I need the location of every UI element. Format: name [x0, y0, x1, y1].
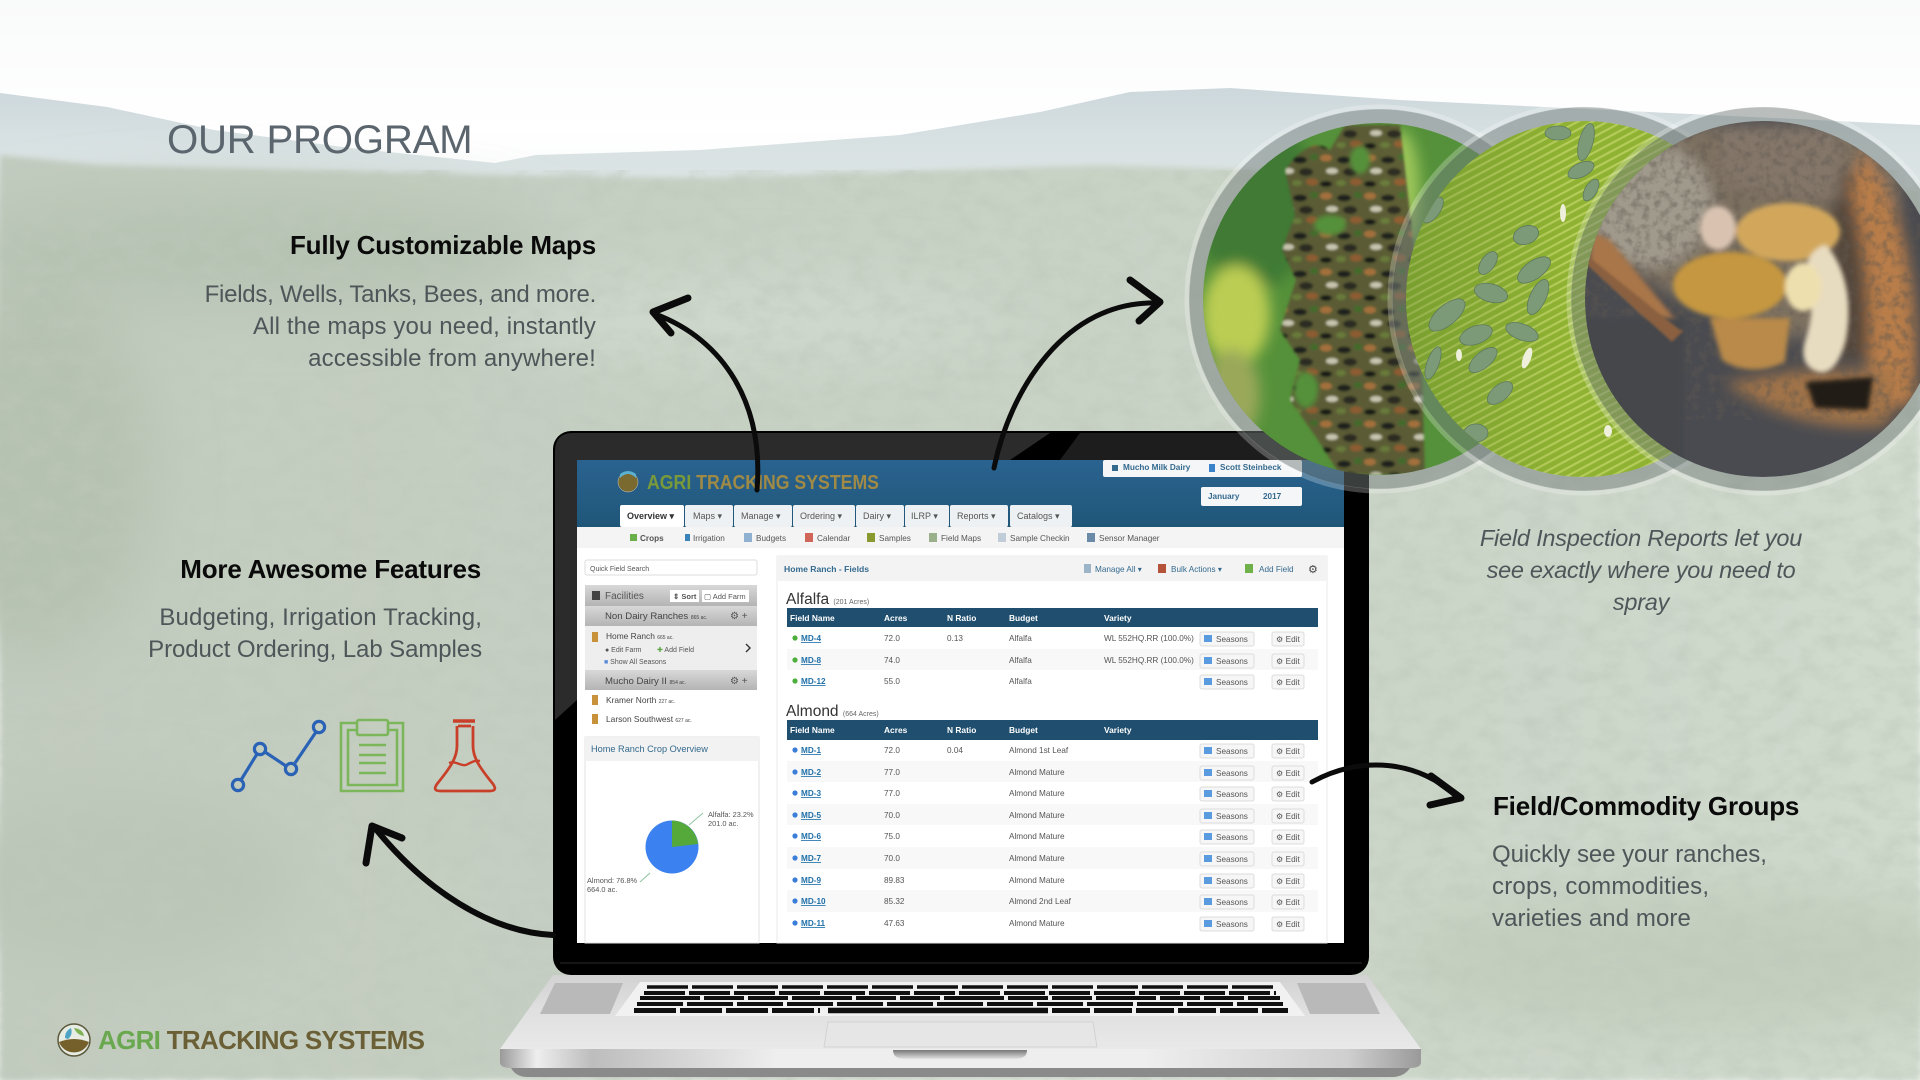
table: alfalfa: 74.0 [884, 656, 900, 665]
table: almond: Almond Mature [1009, 811, 1065, 820]
left sidebar: Facilities [605, 591, 644, 602]
text: commodity description: crops, commodities, [1492, 873, 1709, 900]
table: almond: ⚙ Edit [1276, 747, 1300, 756]
table: almond: Almond Mature [1009, 854, 1065, 863]
crop overview panel with pie chart: Almond: 76.8% [587, 876, 638, 885]
text: field inspection reports: Field Inspection Reports let you [1480, 525, 1802, 551]
table: almond: MD-3 [801, 789, 821, 798]
table: almond: 70.0 [884, 811, 900, 820]
sub navigation [577, 527, 1344, 548]
table: almond: Almond (664 Acres) [786, 703, 879, 720]
app screen [577, 460, 1344, 943]
sub navigation: Sample Checkin [1010, 534, 1070, 543]
main panel header [777, 556, 1327, 943]
table: alfalfa: MD-12 [801, 677, 826, 686]
table: almond: 75.0 [884, 832, 900, 841]
table: almond: 89.83 [884, 876, 905, 885]
table: alfalfa: Seasons [1216, 678, 1248, 687]
table: almond: Almond 2nd Leaf [1009, 897, 1072, 906]
nav tabs: Dairy ▾ [863, 511, 892, 521]
sub navigation: Calendar [817, 534, 850, 543]
table: almond: Almond Mature [1009, 876, 1065, 885]
table: alfalfa: 72.0 [884, 634, 900, 643]
photo 2: green aphids on leaf [1388, 107, 1688, 496]
table: alfalfa: Seasons [1216, 657, 1248, 666]
table: almond: MD-1 [801, 746, 821, 755]
table: almond: Budget [1009, 725, 1038, 735]
arrow: to maps heading [653, 298, 758, 490]
nav tabs: Maps ▾ [693, 511, 723, 521]
left sidebar: Kramer North 227 ac. [606, 695, 675, 705]
title: OUR PROGRAM [167, 117, 472, 162]
table: almond: Seasons [1216, 747, 1248, 756]
table: alfalfa: Alfalfa [1009, 677, 1032, 686]
table: alfalfa: 0.13 [947, 634, 963, 643]
nav tabs: Overview ▾ [627, 511, 675, 521]
table: almond: 47.63 [884, 919, 905, 928]
nav tabs: Reports ▾ [957, 511, 996, 521]
left sidebar: ■ Show All Seasons [604, 659, 667, 666]
table: almond: MD-10 [801, 897, 826, 906]
crop overview panel with pie chart [585, 737, 759, 943]
text: maps description: Fields, Wells, Tanks, Bees, and more. [205, 281, 596, 308]
left sidebar: ● Edit Farm [605, 647, 642, 654]
table: alfalfa: MD-8 [801, 656, 821, 665]
app header bar [577, 460, 1344, 527]
text: field inspection reports: see exactly where you need to [1487, 557, 1795, 583]
sub navigation: Sensor Manager [1099, 534, 1160, 543]
table: almond: 77.0 [884, 789, 900, 798]
table: almond: MD-9 [801, 876, 821, 885]
table: alfalfa: Field Name [790, 613, 835, 623]
left sidebar: Larson Southwest 627 ac. [606, 714, 692, 724]
text: field inspection reports [1480, 525, 1802, 615]
table: alfalfa: MD-4 [801, 634, 821, 643]
table: alfalfa: ⚙ Edit [1276, 635, 1300, 644]
inspection photos [1184, 104, 1920, 496]
table: alfalfa: N Ratio [947, 613, 976, 623]
main panel header: Manage All ▾ [1095, 565, 1142, 574]
table: almond: ⚙ Edit [1276, 898, 1300, 907]
text: features description: Budgeting, Irrigation Tracking, [159, 604, 482, 631]
table: almond: Almond Mature [1009, 789, 1065, 798]
arrow: to feature icons [366, 826, 553, 935]
left sidebar: ✚ Add Field [657, 646, 694, 654]
table: almond: Field Name [790, 725, 835, 735]
table: almond: MD-6 [801, 832, 821, 841]
icon: clipboard [341, 720, 403, 791]
left sidebar: ⚙ + [730, 611, 748, 622]
account menu: Scott Steinbeck [1220, 463, 1282, 472]
left sidebar: Home Ranch 665 ac. [606, 631, 674, 641]
table: almond: ⚙ Edit [1276, 833, 1300, 842]
table: almond: 70.0 [884, 854, 900, 863]
sub navigation: Field Maps [941, 534, 981, 543]
table: alfalfa: WL 552HQ.RR (100.0%) [1104, 656, 1194, 665]
left sidebar: ▢ Add Farm [704, 592, 746, 601]
table: almond: 0.04 [947, 746, 963, 755]
crop overview panel with pie chart: Home Ranch Crop Overview [591, 744, 708, 754]
account menu [1103, 460, 1302, 506]
sub navigation: Samples [879, 534, 911, 543]
keyboard [634, 987, 1288, 1010]
table: almond: 72.0 [884, 746, 900, 755]
table: almond: Variety [1104, 725, 1132, 735]
crop overview panel with pie chart: 201.0 ac. [708, 819, 738, 828]
account menu: Mucho Milk Dairy [1123, 463, 1191, 472]
icon: flask [435, 721, 495, 791]
table: almond: N Ratio [947, 725, 976, 735]
arrow: to field groups [1312, 765, 1461, 805]
table: alfalfa: ⚙ Edit [1276, 678, 1300, 687]
main panel header: ⚙ [1308, 564, 1318, 576]
table: alfalfa: Alfalfa (201 Acres) [786, 591, 869, 608]
table: almond: Almond Mature [1009, 832, 1065, 841]
left sidebar: ⇕ Sort [673, 592, 697, 601]
account menu: 2017 [1263, 492, 1282, 501]
account menu: January [1208, 492, 1240, 501]
table: alfalfa: Alfalfa [1009, 656, 1032, 665]
text: commodity description: Quickly see your ranches, [1492, 841, 1767, 868]
heading: field commodity groups: Field/Commodity Groups [1493, 791, 1799, 821]
table: almond: MD-7 [801, 854, 821, 863]
icon: line chart [232, 721, 325, 791]
left sidebar: Quick Field Search [590, 566, 649, 573]
table: alfalfa: Acres [884, 613, 908, 623]
main panel header: Bulk Actions ▾ [1171, 565, 1222, 574]
table: almond: ⚙ Edit [1276, 855, 1300, 864]
photo 1: aphid cluster [1184, 104, 1492, 494]
text: commodity description: varieties and more [1492, 905, 1691, 932]
table: almond: Seasons [1216, 855, 1248, 864]
text: features description: Product Ordering, Lab Samples [148, 636, 482, 663]
table: almond: Almond Mature [1009, 919, 1065, 928]
table: almond: Seasons [1216, 920, 1248, 929]
app header bar: AGRI TRACKING SYSTEMS [647, 472, 879, 494]
laptop lid [553, 431, 1369, 975]
table: almond: Seasons [1216, 790, 1248, 799]
crop overview panel with pie chart: Alfalfa: 23.2% [708, 810, 754, 819]
table: almond: Seasons [1216, 769, 1248, 778]
left sidebar: Mucho Dairy II 854 ac. [605, 676, 686, 687]
table: almond: Seasons [1216, 812, 1248, 821]
table: almond: 77.0 [884, 768, 900, 777]
table: almond: 85.32 [884, 897, 905, 906]
left sidebar: ⚙ + [730, 676, 748, 687]
table: alfalfa: ⚙ Edit [1276, 657, 1300, 666]
nav tabs [620, 505, 1072, 527]
text: field inspection reports: spray [1613, 589, 1669, 615]
table: almond: Seasons [1216, 833, 1248, 842]
table: almond [786, 703, 1318, 931]
table: almond: Almond 1st Leaf [1009, 746, 1069, 755]
main panel header: Home Ranch - Fields [784, 564, 869, 574]
left sidebar: Non Dairy Ranches 865 ac. [605, 611, 707, 622]
table: almond: MD-5 [801, 811, 821, 820]
table: alfalfa: Variety [1104, 613, 1132, 623]
text: maps description: All the maps you need, instantly [253, 313, 596, 340]
table: alfalfa: Seasons [1216, 635, 1248, 644]
table: almond: ⚙ Edit [1276, 812, 1300, 821]
table: almond: MD-2 [801, 768, 821, 777]
nav tabs: Manage ▾ [741, 511, 781, 521]
table: almond: Seasons [1216, 898, 1248, 907]
nav tabs: Catalogs ▾ [1017, 511, 1060, 521]
heading: fully customizable maps: Fully Customizable Maps [290, 230, 596, 260]
crop overview panel with pie chart: 664.0 ac. [587, 885, 617, 894]
table: almond: Almond Mature [1009, 768, 1065, 777]
logo: agri tracking systems: AGRI TRACKING SYSTEMS [98, 1025, 424, 1055]
text: maps description: accessible from anywhere! [308, 345, 596, 372]
main panel header: Add Field [1259, 565, 1294, 574]
table: alfalfa: WL 552HQ.RR (100.0%) [1104, 634, 1194, 643]
table: almond: MD-11 [801, 919, 826, 928]
table: alfalfa: 55.0 [884, 677, 900, 686]
table: alfalfa: Budget [1009, 613, 1038, 623]
nav tabs: Ordering ▾ [800, 511, 843, 521]
table: alfalfa: Alfalfa [1009, 634, 1032, 643]
sub navigation: Crops [640, 534, 664, 543]
left sidebar [585, 560, 757, 729]
table: almond: ⚙ Edit [1276, 920, 1300, 929]
text: features description [148, 604, 482, 663]
photo 3: worm in almond hull [1569, 105, 1920, 493]
table: alfalfa [786, 591, 1318, 689]
table: almond: ⚙ Edit [1276, 769, 1300, 778]
table: almond: ⚙ Edit [1276, 790, 1300, 799]
table: almond: ⚙ Edit [1276, 877, 1300, 886]
heading: more awesome features: More Awesome Features [180, 554, 481, 584]
sub navigation: Budgets [756, 534, 786, 543]
text: commodity description [1492, 841, 1767, 932]
nav tabs: ILRP ▾ [911, 511, 938, 521]
text: maps description [205, 281, 596, 372]
sub navigation: Irrigation [693, 534, 725, 543]
table: almond: Acres [884, 725, 908, 735]
laptop base [500, 975, 1421, 1077]
table: almond: Seasons [1216, 877, 1248, 886]
arrow: to inspection photos [994, 280, 1160, 468]
